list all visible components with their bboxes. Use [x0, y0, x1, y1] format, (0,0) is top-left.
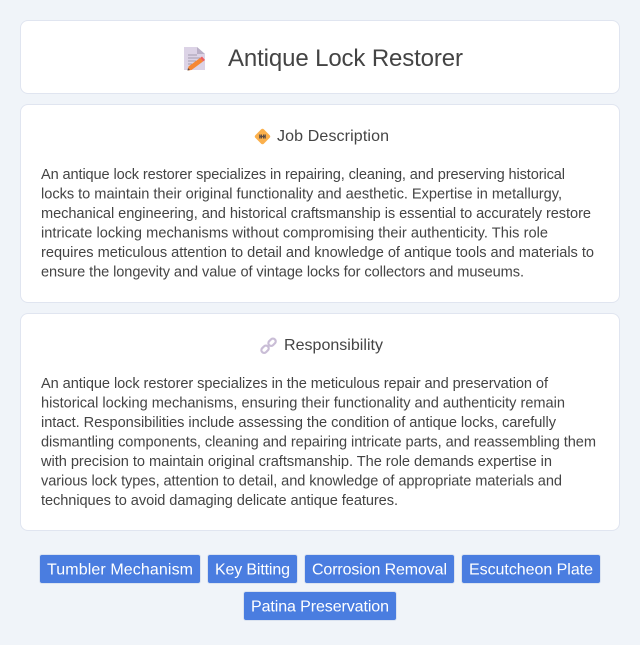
text block: responsibility: historical locking mechanisms, ensuring their functionality and authenticity remain [41, 396, 565, 412]
tag: Patina Preservation: Patina Preservation [251, 598, 389, 616]
icon: chain link [260, 338, 277, 354]
icon: document with pencil [184, 47, 205, 70]
tag: Tumbler Mechanism [39, 554, 201, 584]
text block: job description: An antique lock restorer specializes in repairing, cleaning, and preserving historical [41, 167, 565, 183]
text block: job description: mechanical engineering, and historical craftsmanship is essential to accurately restore [41, 206, 591, 222]
heading: job description: Job Description [277, 128, 389, 145]
text block: job description: requires meticulous attention to detail and knowledge of antique tools and materials to [41, 245, 594, 261]
text block: responsibility: intact. Responsibilities include assessing the condition of antique locks, carefully [41, 415, 557, 431]
icon: orange diamond sign [254, 128, 270, 144]
text block: responsibility [40, 376, 596, 509]
tag: Corrosion Removal: Corrosion Removal [312, 562, 447, 578]
text block: responsibility: various lock types, attention to detail, and knowledge of appropriate materials and [41, 474, 562, 490]
text block: job description: locks to maintain their original functionality and aesthetic. Expertise in metallurgy, [41, 186, 562, 202]
tag: Escutcheon Plate [461, 554, 601, 584]
heading: responsibility: Responsibility [284, 337, 383, 354]
text block: responsibility: with precision to maintain original craftsmanship. The role demands expertise in [40, 454, 552, 470]
title: Antique Lock Restorer [228, 45, 463, 72]
tag: Corrosion Removal [304, 554, 455, 584]
panel: responsibility [20, 313, 620, 531]
tag: Escutcheon Plate: Escutcheon Plate [469, 562, 593, 578]
text block: responsibility: techniques to avoid damaging delicate antique features. [41, 493, 398, 509]
text block: job description: ensure the longevity and value of vintage locks for collectors and museums. [41, 264, 524, 280]
text block: job description [41, 167, 594, 280]
text block: responsibility: dismantling components, cleaning and repairing intricate parts, and reassembling them [41, 434, 596, 450]
tag: Patina Preservation [243, 591, 397, 621]
panel: job description [20, 104, 620, 303]
tag: Tumbler Mechanism: Tumbler Mechanism [47, 562, 193, 578]
text block: responsibility: An antique lock restorer specializes in the meticulous repair and preservation of [41, 376, 549, 392]
text block: job description: intricate locking mechanisms without compromising their authenticity. This role [41, 226, 548, 242]
tag: Key Bitting [207, 554, 298, 584]
panel: title card [20, 20, 620, 94]
tag: Key Bitting: Key Bitting [215, 562, 290, 578]
